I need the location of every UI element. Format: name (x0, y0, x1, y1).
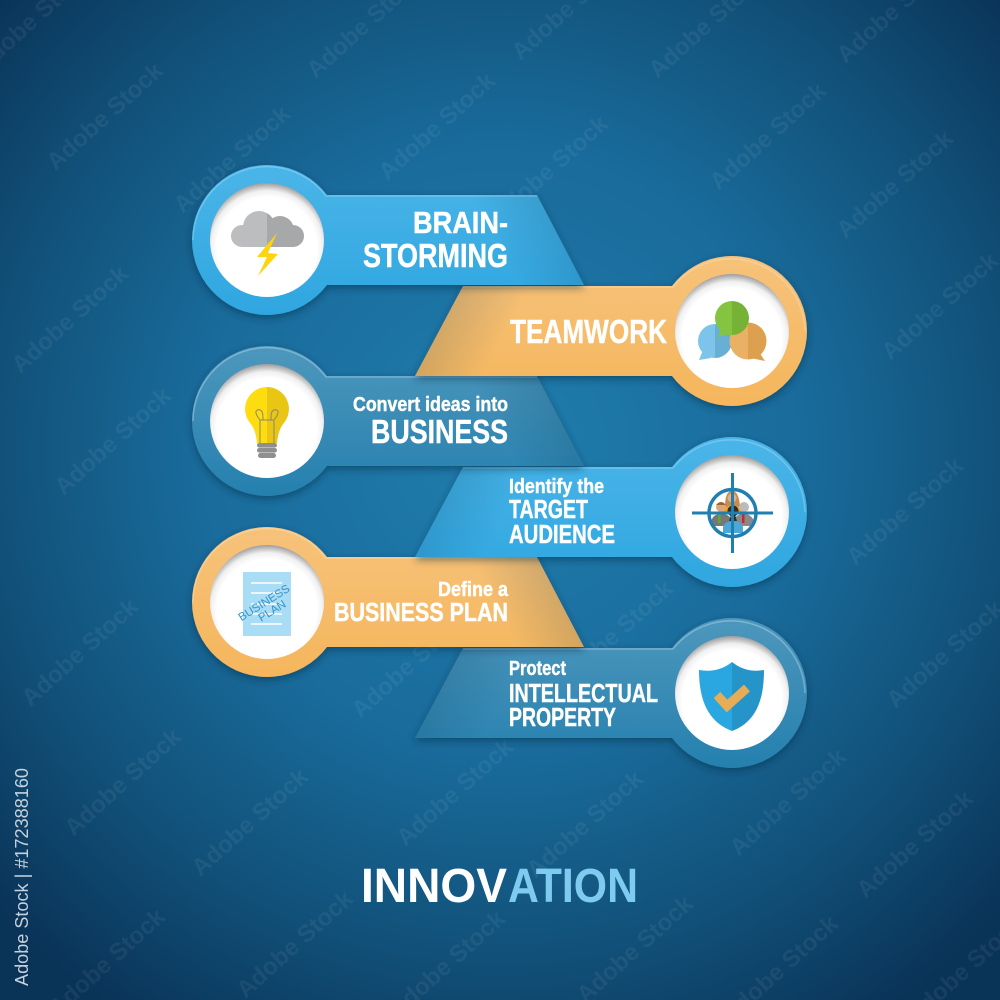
label: define a business plan: BUSINESS PLAN (334, 597, 508, 627)
watermark pattern: Adobe Stock (6, 260, 134, 379)
watermark pattern: Adobe Stock (41, 57, 169, 176)
label: identify the target audience: AUDIENCE (509, 519, 615, 549)
watermark pattern: Adobe Stock (831, 125, 959, 244)
icon: storm cloud (210, 183, 324, 297)
title: INNOV (361, 860, 507, 913)
label: identify the target audience: Identify the (509, 476, 604, 498)
watermark pattern: Adobe Stock (16, 593, 144, 712)
label: protect intellectual property (509, 658, 658, 732)
icon: speech bubbles (675, 274, 789, 388)
panel: teamwork (415, 256, 807, 406)
watermark pattern: Adobe Stock (373, 67, 501, 186)
watermark pattern: Adobe Stock (724, 743, 852, 862)
icon: business plan document (210, 545, 324, 659)
icon: business plan document: PLAN (256, 598, 288, 625)
panel: identify the target audience (415, 437, 807, 587)
label: protect intellectual property: INTELLECTUAL (509, 678, 658, 708)
title (361, 860, 638, 913)
icon: light bulb (210, 364, 324, 478)
watermark pattern: Adobe Stock (391, 733, 519, 852)
label: define a business plan: Define a (438, 579, 509, 601)
watermark pattern: Adobe Stock (841, 452, 969, 571)
icon: business plan document: BUSINESS (237, 583, 293, 624)
panel: brainstorming (192, 165, 584, 315)
watermark pattern: Adobe Stock (186, 763, 314, 882)
watermark pattern: Adobe Stock (231, 885, 359, 1000)
watermark pattern: Adobe Stock (876, 247, 1000, 366)
label: brainstorming: BRAIN- (413, 205, 508, 240)
label: teamwork: TEAMWORK (510, 313, 667, 350)
watermark pattern: Adobe Stock (521, 765, 649, 884)
watermark pattern: Adobe Stock (49, 382, 177, 501)
label: convert ideas into business: BUSINESS (371, 413, 508, 450)
watermark pattern: Adobe Stock (851, 785, 979, 904)
watermark pattern: Adobe Stock (59, 723, 187, 842)
label: identify the target audience: TARGET (509, 494, 588, 524)
icon: shield (675, 636, 789, 750)
panel: define a business plan (192, 527, 584, 677)
label: identify the target audience (509, 476, 615, 549)
watermark pattern: Adobe Stock (346, 605, 474, 724)
label: protect intellectual property: Protect (509, 658, 566, 680)
icon: target audience crosshair (675, 455, 789, 569)
label: brainstorming (363, 205, 508, 274)
title: ATION (508, 860, 638, 913)
label: convert ideas into business (353, 394, 508, 450)
watermark pattern: Adobe Stock (551, 575, 679, 694)
stock id caption: Adobe Stock | #172388160 (12, 768, 32, 986)
watermark pattern: Adobe Stock (168, 100, 296, 219)
label: define a business plan (334, 579, 509, 627)
label: convert ideas into business: Convert ideas into (353, 394, 508, 416)
label: brainstorming: STORMING (363, 237, 508, 274)
watermark pattern: Adobe Stock (486, 110, 614, 229)
watermark pattern: Adobe Stock (704, 77, 832, 196)
panel: convert ideas into business (192, 346, 584, 496)
panel: protect intellectual property (415, 618, 807, 768)
label: protect intellectual property: PROPERTY (509, 702, 616, 732)
